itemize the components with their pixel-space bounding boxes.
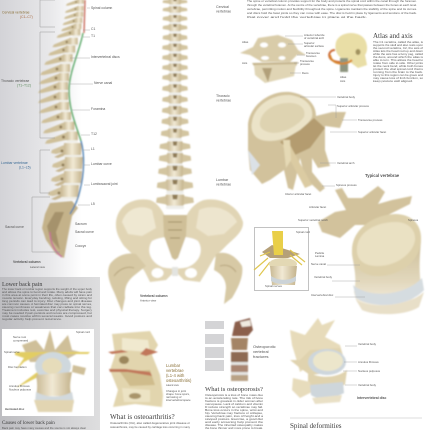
text block: lower back pain: Treatment includes rest, exercise and physical therapy. Surgery	[2, 308, 93, 312]
text block: atlas and axis: the dens, around which the atlas is	[373, 55, 424, 59]
labels: typical vertebra: Transverse process	[358, 118, 383, 122]
labels: cervical and skull: Transverse	[300, 59, 314, 63]
labels: lateral spine: Vertebral column	[13, 260, 41, 264]
text block: causes: Back pain may have many causes and the source is not always clear	[2, 426, 86, 430]
text block: atlas and axis: Injury to this region can be grave and	[373, 73, 424, 77]
labels: region names: Cervical	[216, 5, 229, 9]
heading: atlas and axis: Atlas and axis	[373, 32, 413, 40]
text block: lower back pain: most cases resolve within several weeks. Good posture and	[2, 314, 93, 318]
label: lumbar vertebrae with osteoarthritis: intervertebral space	[166, 398, 191, 402]
label: typical vertebra: Typical vertebrae	[365, 173, 400, 178]
panel: herniated disc illustration: Disc herniation	[8, 365, 27, 369]
text block: atlas and axis: may cause loss of limb function, so	[373, 76, 424, 80]
labels: typical vertebra	[285, 95, 386, 209]
labels: lumbar vertebra: Vertebral body	[314, 275, 333, 279]
text block: atlas and axis	[373, 40, 424, 83]
heading: what is osteoarthritis: What is osteoarthritis?	[110, 413, 175, 421]
text block: lower back pain: regular activity help prevent recurrence.	[2, 317, 62, 321]
labels: lateral spine: Sacral curve	[75, 230, 94, 234]
text block: atlas and axis: let the neck bend, while both bones	[373, 64, 424, 68]
labels: region names	[216, 5, 231, 186]
text block: osteoporosis	[205, 393, 264, 430]
panel: lower back pain background	[0, 277, 100, 430]
text block: osteoarthritis: Osteoarthritis (OA), also called degenerative joint disease or	[110, 421, 190, 425]
labels: cervical and skull: Axis	[242, 61, 248, 65]
illustration: lumbar vertebra and disc	[318, 186, 424, 314]
text block: osteoporosis: and early screening help prevent the	[205, 420, 264, 424]
text block: top paragraph: through the vertebral foramen. At the centre of the vertebrae, there is a spinal nerve that passes between the bones at each level.	[247, 3, 417, 7]
label: osteoporotic vertebral fractures: vertebral	[253, 349, 269, 354]
labels: typical vertebra: Vertebral arch	[337, 161, 355, 165]
text block: lower back pain: long periods can lead to injury. Disc changes and joint disease	[2, 299, 93, 303]
labels: stacked vertebrae: Vertebral body	[358, 383, 377, 387]
text block: osteoporosis: menopause. Lack of calcium and vitamin	[205, 402, 264, 406]
text block: osteoporosis: to an accelerating rate. The risk of bone	[205, 396, 264, 400]
labels: lumbar vertebra: Pedicle	[315, 251, 325, 255]
labels: cervical and skull: Superior	[304, 41, 315, 45]
panel: herniated disc illustration: Annulus fibrosus	[9, 384, 30, 388]
label: lumbar vertebrae with osteoarthritis: osteoarthritis)	[166, 378, 192, 383]
labels: lateral spine: Lumbar vertebrae	[1, 161, 28, 165]
labels: lateral spine: Foramina	[91, 107, 105, 111]
text block: lower back pain: The lower back or lumbar region supports the weight of the upper body	[2, 287, 93, 291]
text block: osteoporosis: fracture is greatest in older women after	[205, 399, 263, 403]
leader lines	[70, 8, 365, 385]
panel: herniated disc illustration: compressed	[13, 338, 29, 342]
labels: lateral spine: Cervical vertebrae	[2, 10, 30, 14]
panel: left grey column	[0, 0, 82, 277]
labels: region names: vertebrae	[216, 98, 231, 102]
icons: osteoporosis stage boxes	[205, 321, 224, 371]
labels: lateral spine: L1	[91, 147, 95, 151]
labels: lateral spine: Coccyx	[75, 244, 86, 248]
panel: spinal cord inset: Spinal nerves	[265, 284, 283, 288]
labels: region names: Lumbar	[216, 178, 229, 182]
labels: lumbar vertebra: Superior vertebral notch	[298, 218, 328, 222]
text block: lower back pain	[2, 287, 93, 321]
text block: atlas and axis: supports the skull and also rests upon	[373, 43, 424, 47]
labels: cervical and skull: foramen	[306, 54, 317, 58]
text block: osteoarthritis: osteoarthrosis, may be caused by cartilage loss occurring in many	[110, 425, 191, 429]
labels: lateral spine: T1	[91, 34, 95, 38]
labels: lateral spine: Lateral view	[30, 265, 46, 269]
illustration: stacked vertebrae with disc	[290, 318, 347, 404]
labels: stacked vertebrae: Nucleus pulposus	[358, 369, 381, 373]
illustration: typical vertebra superior oblique	[248, 92, 346, 192]
illustration: osteoarthritic lumbar vertebrae	[108, 331, 163, 407]
labels: lateral spine: (C1–C7)	[20, 15, 33, 19]
text block: atlas and axis: The C1 vertebra, called the atlas, is	[373, 40, 424, 44]
text block: top paragraph	[247, 0, 417, 19]
label: lumbar vertebrae with osteoarthritis: Lateral view	[166, 384, 179, 387]
text block: osteoporosis: the bone thinner and more prone to break.	[205, 426, 263, 430]
chart: anterior spine	[156, 0, 194, 209]
labels: cervical and skull: Dens	[302, 71, 309, 75]
label: lumbar vertebrae with osteoarthritis: shape: bone spurs,	[166, 392, 190, 396]
heading: lower back pain: Lower back pain	[2, 282, 42, 288]
panel: herniated disc illustration: Nerve root	[13, 335, 26, 339]
labels: lateral spine: Sacral curve	[5, 225, 24, 229]
labels: lateral spine: Lumbosacral joint	[91, 182, 118, 186]
labels: lateral spine: (L1–L5)	[19, 166, 31, 170]
labels: lateral spine: Spinal column	[91, 6, 112, 10]
illustration: skull with atlas and axis	[329, 33, 367, 72]
labels: lateral spine: (T1–T12)	[17, 84, 31, 88]
panel: spinal cord inset	[254, 228, 310, 290]
chart: pelvis and femurs	[108, 199, 243, 312]
label: lumbar vertebrae with osteoarthritis: Lumbar	[166, 363, 181, 368]
labels: stacked vertebrae	[357, 342, 387, 400]
text block: lower back pain: and allows the spine to bend and rotate. Many adults will have pain	[2, 290, 93, 294]
labels: lateral spine: Sacrum	[75, 222, 87, 226]
illustration: cervical vertebra	[240, 35, 306, 83]
text block: top paragraph: and discs hold the facet joints so they can move with ease. The disc is held in place by ligaments and tendons of the back.	[247, 11, 417, 15]
labels: region names: vertebrae	[216, 10, 231, 14]
text block: osteoporosis: D reduce strength so vertebrae may fail.	[205, 405, 263, 409]
panel: herniated disc illustration	[2, 329, 94, 416]
text block: osteoporosis: causing back pain, loss of height and a	[205, 414, 264, 418]
label: lumbar vertebrae with osteoarthritis: (L1-4 with	[166, 373, 185, 378]
text block: atlas and axis: the second vertebra, C2, the axis of	[373, 46, 423, 50]
text block: lower back pain: are common causes. A herniated disc may press on spinal nerves,	[2, 302, 92, 306]
labels: stacked vertebrae: Annulus fibrosus	[358, 360, 379, 364]
labels: lumbar vertebra: Nerve canal	[311, 262, 326, 266]
labels: lateral spine: L5	[91, 202, 95, 206]
labels: typical vertebra: Inferior articular facet	[285, 192, 311, 196]
panel: spinal cord inset: Spinal cord	[296, 230, 310, 234]
labels: cervical and skull: Atlas	[242, 40, 249, 44]
labels: cervical and skull: Axis	[340, 79, 346, 83]
text block: atlas and axis: rotate from side to side. Other joints	[373, 61, 424, 65]
label: lumbar vertebrae with osteoarthritis: Changes in joint	[166, 389, 186, 393]
label: lumbar vertebrae with osteoarthritis	[166, 363, 192, 402]
labels: lateral spine: Anterior view	[140, 298, 157, 302]
labels: lateral spine: Thoracic vertebrae	[1, 79, 29, 83]
labels: lateral spine: Vertebral column	[140, 294, 168, 298]
text block: osteoporosis: Osteoporosis is a loss of bone mass due	[205, 393, 264, 397]
labels: lateral spine: Intervertebral discs	[91, 55, 120, 59]
labels: typical vertebra: Vertebral body	[337, 95, 356, 99]
panel: herniated disc illustration: Spinal nerve	[4, 350, 20, 354]
text block: osteoporosis: disease. The inherited osteopathy makes	[205, 423, 264, 427]
text block: lower back pain: may be needed if pain persists and nerves are compressed, but	[2, 311, 92, 315]
labels: cervical and skull	[242, 33, 347, 83]
labels: lumbar vertebra	[298, 218, 419, 297]
labels: lateral spine: Lumbar curve	[91, 162, 112, 166]
illustration: osteoporotic vertebral fractures	[231, 318, 253, 381]
labels: cervical and skull: process	[300, 62, 310, 66]
label: lumbar vertebrae with osteoarthritis: narrowing of	[166, 395, 182, 399]
text block: lower back pain: in this area at some point in their life, often caused by strain and	[2, 293, 93, 297]
labels: cervical and skull: Atlas	[340, 75, 347, 79]
text block: osteoporosis: stooped posture. Exercise, a good diet	[205, 417, 263, 421]
text block: osteoporosis: Bone loss occurs in the spine, wrist and	[205, 408, 264, 412]
text block: osteoarthritis	[110, 421, 191, 429]
labels: lateral spine: T12	[91, 132, 97, 136]
labels: lumbar vertebra: Intervertebral disc	[311, 293, 334, 297]
label: osteoporotic vertebral fractures: Osteoporotic	[253, 344, 276, 349]
labels: cervical and skull: articular surface	[304, 44, 324, 48]
labels: lateral spine: Nerve canal	[94, 81, 112, 85]
labels: lumbar vertebra: Spinous	[408, 218, 419, 222]
labels: typical vertebra: Superior articular facet	[358, 130, 386, 134]
labels: typical vertebra: Spinous process	[336, 183, 357, 187]
text block: lower back pain: causing numbness or weakness that can radiate into the leg.	[2, 305, 92, 309]
labels: lateral spine	[1, 6, 168, 302]
labels: cervical and skull: Transverse	[306, 51, 320, 55]
artwork: side and front spine and pelvis	[38, 0, 243, 312]
label: lumbar vertebrae with osteoarthritis: vertebrae	[166, 368, 184, 373]
labels: cervical and skull: of vertebral arch	[304, 36, 325, 40]
panel: herniated disc illustration: Nucleus pulposus	[9, 388, 32, 392]
text block: top paragraph: vertebrae, permitting motion and flexibility throughout the spine. Ligaments maintain the stability of the spine and its curves.	[247, 7, 417, 11]
text block: top paragraph: that cover and hold the vertebrae in place at the back.	[247, 15, 367, 19]
labels: typical vertebra: Articular facet	[309, 205, 326, 209]
labels: region names: vertebrae	[216, 182, 231, 186]
spinal cord colored curves	[50, 0, 85, 257]
panel: herniated disc illustration: Herniated disc	[5, 407, 25, 411]
labels: cervical and skull: Anterior tubercle	[304, 33, 325, 37]
label: osteoporotic vertebral fractures	[253, 344, 276, 359]
chart: lateral spine	[38, 0, 85, 258]
label: osteoporotic vertebral fractures: fractures	[253, 354, 269, 359]
labels: lumbar vertebra: Lamina	[315, 254, 325, 258]
text block: atlas and axis: while the axis has a bony peg, called	[373, 52, 424, 56]
text block: atlas and axis: able to turn. This allows the head to	[373, 58, 424, 62]
heading: what is osteoporosis: What is osteoporosis?	[205, 386, 263, 393]
labels: region names: Thoracic	[216, 94, 230, 98]
heading: spinal deformities: Spinal deformities	[290, 422, 342, 430]
labels: stacked vertebrae: Vertebral body	[358, 342, 377, 346]
text block: osteoporosis: hip. Vertebrae may fracture or collapse,	[205, 411, 263, 415]
text block: atlas and axis: protect the vital spinal cord that is	[373, 67, 424, 71]
text block: atlas and axis: Atlas lets the head nod up and down	[373, 49, 424, 53]
text block: atlas and axis: keep posture well aligned.	[373, 79, 413, 83]
labels: lateral spine: C1	[91, 27, 95, 31]
labels: typical vertebra: Superior articular process	[337, 104, 369, 108]
text block: atlas and axis: running from the brain to the back.	[373, 70, 423, 74]
labels: stacked vertebrae: Intervertebral disc	[357, 396, 387, 400]
text block: lower back pain: muscle tension. Everyday bending, twisting, lifting and sitting for	[2, 296, 92, 300]
panel: herniated disc illustration: Spinal cord	[76, 330, 90, 334]
heading: causes of lower back pain: Causes of lower back pain	[2, 421, 55, 426]
